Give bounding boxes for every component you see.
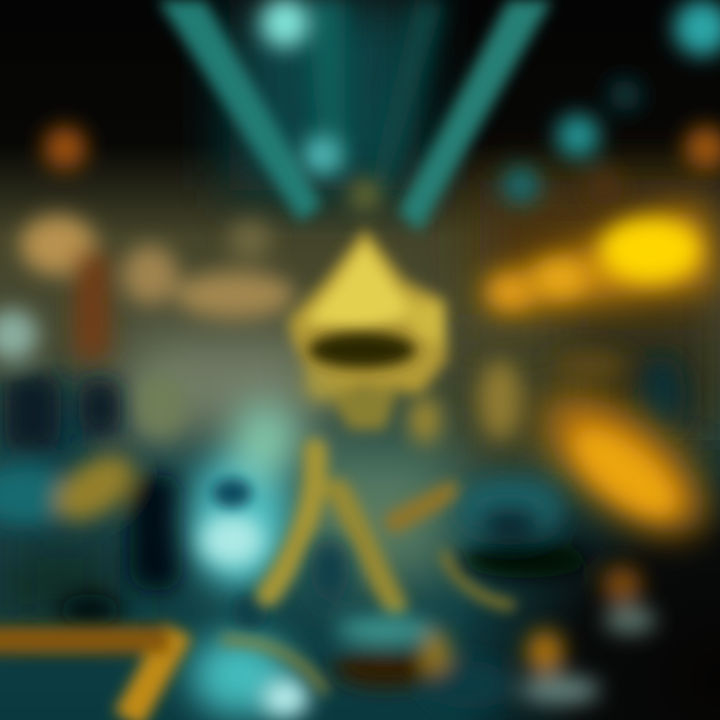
- dark star centre: [308, 332, 416, 368]
- bright cyan glow: [190, 402, 299, 717]
- glowing teal and orange orbs: [43, 0, 720, 211]
- orange ellipse lower right: [522, 370, 720, 560]
- yellow branching lines: [0, 450, 510, 720]
- central right muted shapes: [132, 349, 686, 440]
- left tan blocks: [20, 215, 295, 360]
- golden star: [288, 228, 447, 444]
- left dark teal blocks: [0, 309, 182, 626]
- dark lower right corner: [420, 440, 720, 720]
- yellow band on the right: [485, 205, 715, 312]
- dark discs lower centre and right: [310, 480, 656, 709]
- teal light beams: [158, 0, 552, 232]
